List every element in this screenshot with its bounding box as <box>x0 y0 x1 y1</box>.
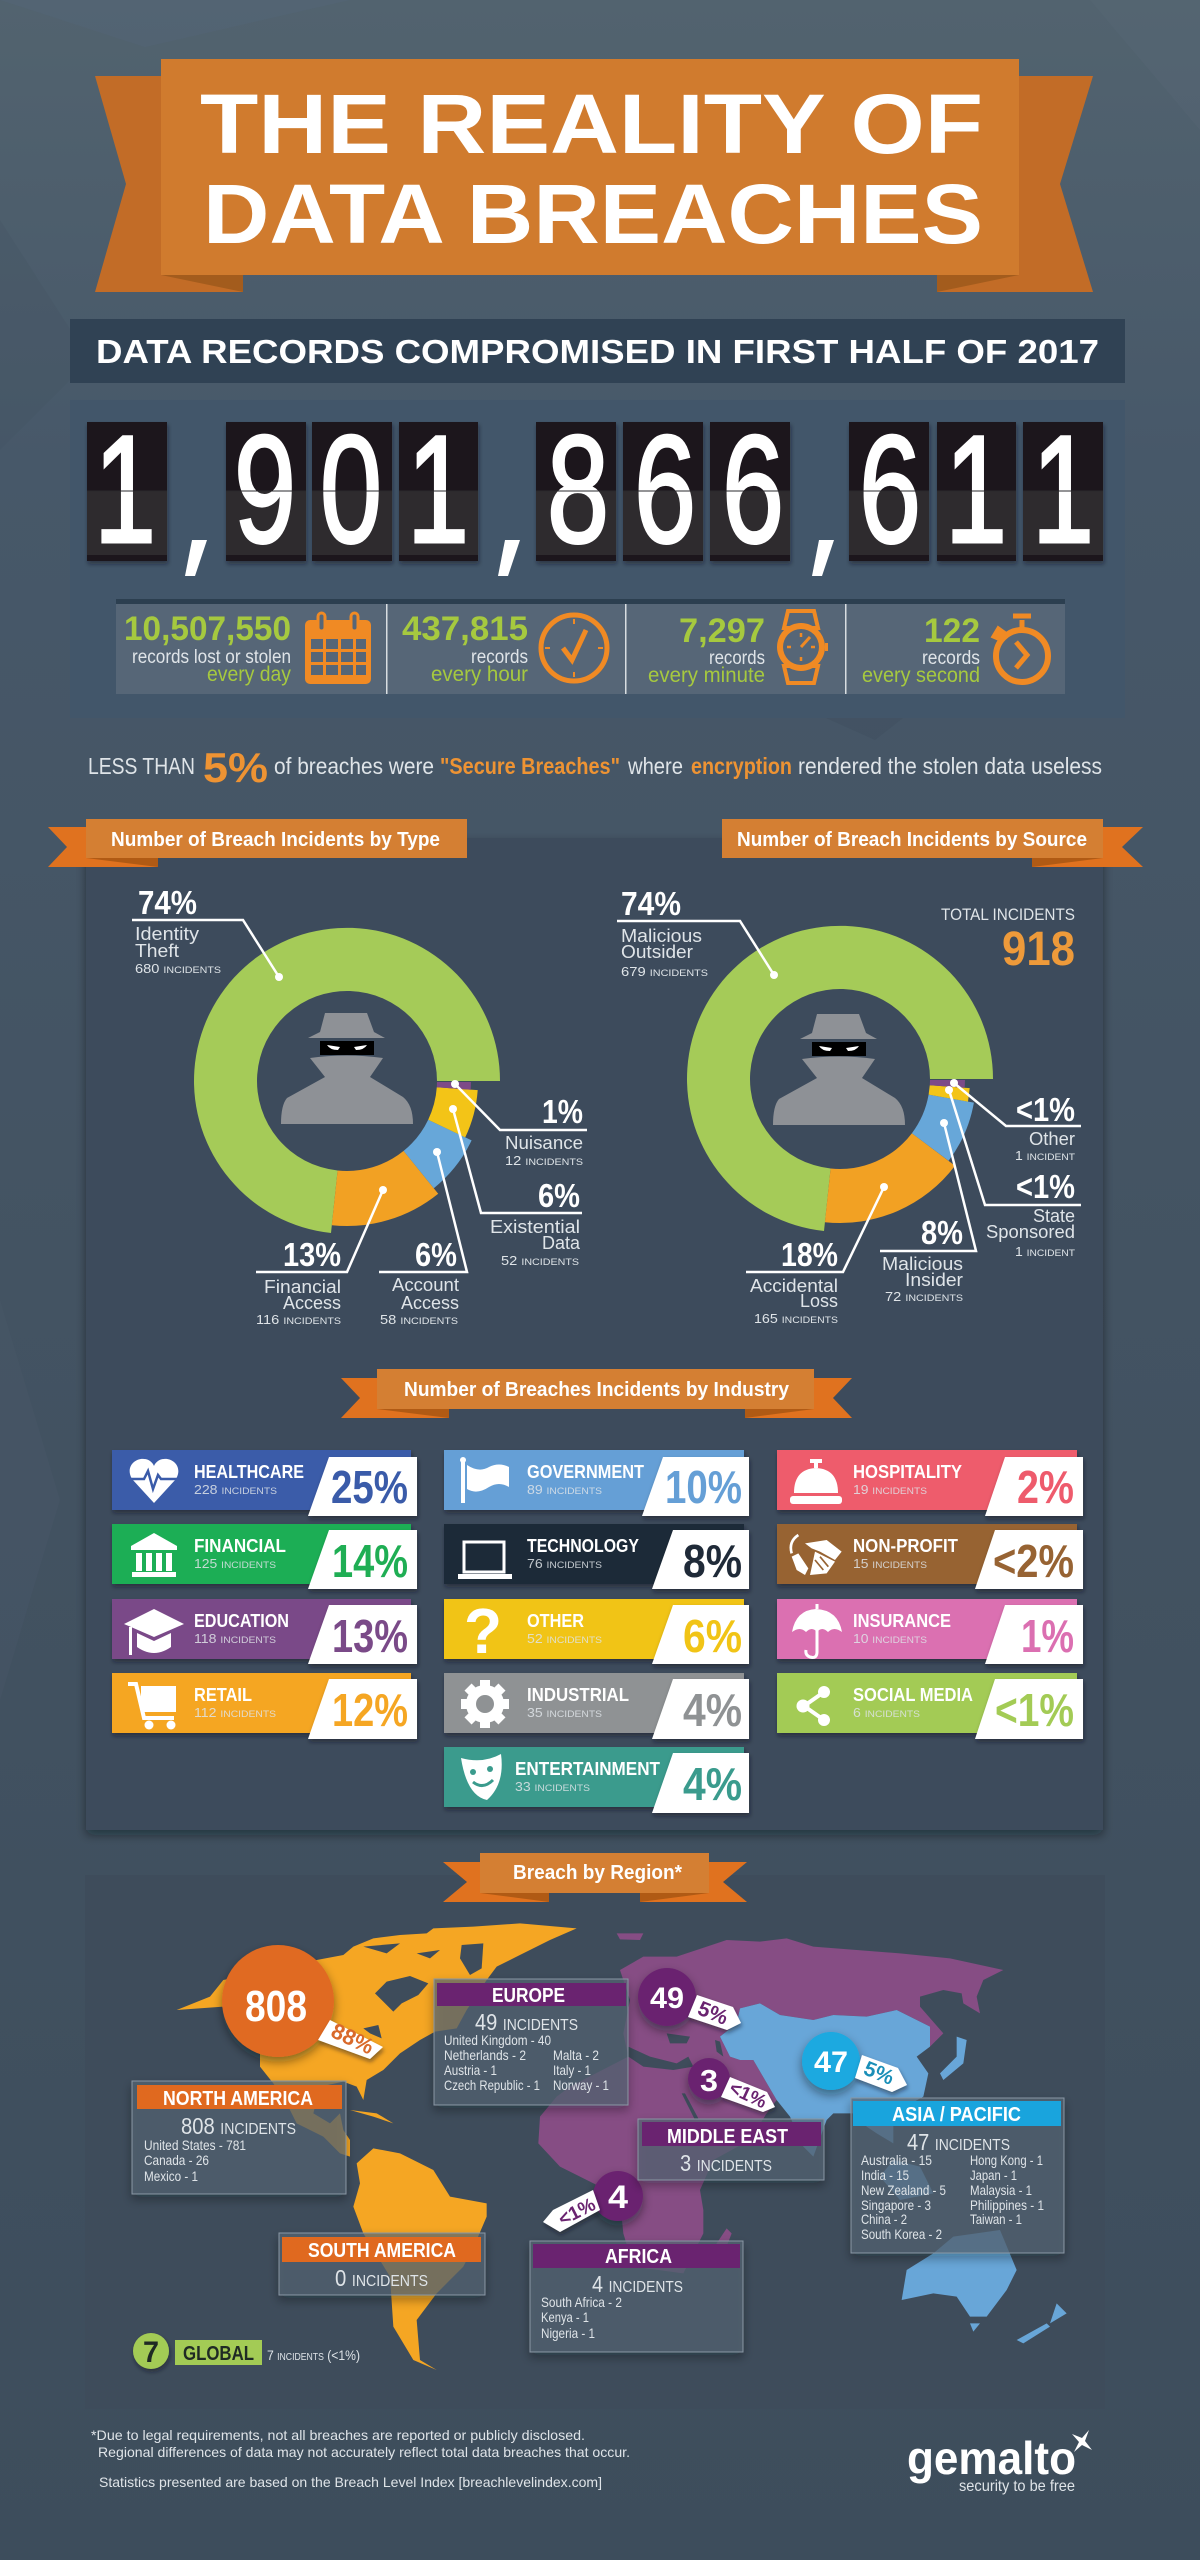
callout: malicious outsider: Malicious <box>621 926 702 946</box>
icon: spy <box>773 1014 905 1125</box>
tag: africa <1% <box>543 2190 600 2232</box>
icon: service bell <box>790 1459 842 1504</box>
bar: healthcare: 25% <box>331 1461 408 1513</box>
panel: south america: SOUTH AMERICA <box>308 2240 456 2262</box>
bar: technology <box>444 1524 749 1589</box>
callout: other: <1% <box>1016 1091 1075 1128</box>
tag: 88%: 88% <box>327 2018 378 2059</box>
icon: shopping cart <box>128 1684 176 1730</box>
bar: government <box>444 1450 749 1516</box>
panel: middle east: 3 INCIDENTS <box>680 2150 772 2176</box>
icon: gear <box>451 1670 519 1738</box>
badge: asia pacific 47: 47 <box>814 2046 848 2079</box>
callout: financial access: 13% <box>283 1236 341 1273</box>
bar: other: 52 INCIDENTS <box>527 1631 602 1646</box>
icon: umbrella <box>792 1604 842 1657</box>
bar: retail <box>112 1673 417 1739</box>
total incidents: 918 <box>1002 923 1075 976</box>
panel: north america: United States - 781 <box>144 2137 246 2153</box>
legend: global: 7 INCIDENTS (<1%) <box>267 2347 360 2363</box>
icon: flag <box>460 1457 509 1503</box>
flip counter: 1 <box>945 404 1007 575</box>
callout: malicious insider: Malicious <box>882 1254 963 1274</box>
stat: every second <box>862 612 980 687</box>
bar: other: 6% <box>683 1610 742 1662</box>
panel: africa <box>530 2241 743 2352</box>
callout: nuisance: Nuisance <box>505 1133 583 1153</box>
bar: hospitality <box>777 1450 1083 1516</box>
title ribbon <box>95 59 1093 292</box>
stat: every minute: records <box>709 648 765 669</box>
bar: education <box>112 1599 417 1664</box>
bar: healthcare <box>112 1450 417 1516</box>
badge: middle east 3: 3 <box>700 2063 718 2098</box>
stat: every minute: every minute <box>648 664 765 687</box>
callout: state sponsored: State <box>1033 1206 1075 1226</box>
legend: global <box>133 2333 360 2369</box>
panel: europe: 49 INCIDENTS <box>475 2009 578 2035</box>
stats strip <box>116 599 1065 694</box>
callout: malicious insider: Insider <box>905 1270 963 1290</box>
bar: government: GOVERNMENT <box>527 1462 644 1482</box>
legend: global: 7 <box>143 2336 159 2369</box>
bar: non-profit: 15 INCIDENTS <box>853 1556 927 1571</box>
panel: africa: AFRICA <box>605 2246 672 2268</box>
stat: every minute: 7,297 <box>679 612 765 650</box>
tag: asia pacific 5% <box>855 2055 907 2092</box>
panel: asia pacific: Australia - 15 <box>861 2152 932 2168</box>
flip counter: 1 <box>407 404 469 575</box>
stat: every second: 122 <box>924 612 980 650</box>
icon: handshake <box>791 1535 842 1575</box>
callout: account access <box>379 1148 467 1327</box>
badge: africa 4: 4 <box>608 2179 628 2215</box>
bar: education: EDUCATION <box>194 1611 289 1631</box>
bar: entertainment: ENTERTAINMENT <box>515 1759 660 1779</box>
bar: social media: 6 INCIDENTS <box>853 1705 920 1720</box>
panel: europe: Austria - 1 <box>444 2062 497 2078</box>
bar: industrial: 35 INCIDENTS <box>527 1705 602 1720</box>
panel: asia pacific: ASIA / PACIFIC <box>892 2104 1021 2126</box>
logo: gemalto: gemalto <box>907 2432 1076 2484</box>
map: eurasia and africa <box>538 1933 1067 2343</box>
badge: asia pacific 47 <box>802 2032 860 2090</box>
tag: europe 5%: 5% <box>694 1997 731 2030</box>
callout: other: Other <box>1029 1129 1075 1149</box>
donut chart: by type <box>194 928 500 1233</box>
icon: bank <box>131 1533 177 1577</box>
icon: stopwatch <box>992 616 1048 682</box>
icon: wristwatch <box>777 611 828 683</box>
stat: every second: records <box>922 648 980 669</box>
callout: accidental loss: 18% <box>781 1236 838 1273</box>
panel: asia pacific: 47 INCIDENTS <box>907 2129 1010 2155</box>
ribbon: by region <box>443 1853 747 1902</box>
stat: every second: every second <box>862 664 980 687</box>
ribbon: by type: Number of Breach Incidents by Type <box>111 829 440 851</box>
tag: middle east <1%: <1% <box>726 2078 770 2113</box>
callout: account access: Access <box>401 1293 459 1313</box>
callout: accidental loss <box>746 1183 888 1326</box>
callout: nuisance: 1% <box>542 1093 583 1130</box>
panel: north america: 808 INCIDENTS <box>181 2113 296 2139</box>
encryption statement: of breaches were <box>274 753 434 779</box>
bar: financial <box>112 1524 417 1589</box>
stat: every day: 10,507,550 <box>124 610 291 648</box>
subtitle bar: DATA RECORDS COMPROMISED IN FIRST HALF OF 2017 <box>96 333 1099 370</box>
panel: north america: NORTH AMERICA <box>163 2088 313 2110</box>
footnote <box>91 2427 630 2490</box>
panel: middle east <box>638 2119 824 2180</box>
callout: state sponsored: 1 INCIDENT <box>1015 1244 1075 1259</box>
encryption statement: where <box>627 753 683 779</box>
bar: insurance <box>777 1599 1083 1664</box>
badge: europe 49 <box>638 1968 696 2026</box>
callout: malicious outsider: 74% <box>621 885 681 922</box>
footnote: Statistics presented are based on the Breach Level Index [breachlevelindex.com] <box>99 2474 602 2490</box>
panel: asia pacific: Hong Kong - 1 <box>970 2152 1043 2168</box>
bar: retail: RETAIL <box>194 1685 252 1705</box>
callout: malicious outsider: 679 INCIDENTS <box>621 964 708 979</box>
bar: financial: FINANCIAL <box>194 1536 286 1556</box>
panel: asia pacific: Japan - 1 <box>970 2167 1017 2183</box>
bar: industrial <box>444 1670 749 1739</box>
panel: europe: EUROPE <box>492 1985 565 2007</box>
stat: every day: every day <box>207 663 291 686</box>
panel: asia pacific: New Zealand - 5 <box>861 2182 946 2198</box>
bar: industrial: INDUSTRIAL <box>527 1685 629 1705</box>
callout: existential data <box>449 1105 582 1268</box>
panel: asia pacific: India - 15 <box>861 2167 909 2183</box>
icon: theatre mask <box>461 1754 502 1800</box>
panel: incidents <box>86 838 1103 1830</box>
bar: entertainment <box>444 1747 749 1813</box>
flip counter: 6 <box>859 404 921 575</box>
panel: map <box>85 1875 1105 2409</box>
callout: existential data: 52 INCIDENTS <box>501 1253 579 1268</box>
callout: accidental loss: 165 INCIDENTS <box>754 1311 838 1326</box>
bar: government: 10% <box>665 1461 742 1513</box>
bar: entertainment: 33 INCIDENTS <box>515 1779 590 1794</box>
panel: asia pacific <box>851 2098 1064 2253</box>
bar: social media <box>777 1673 1083 1739</box>
flip counter: 1 <box>1032 404 1094 575</box>
map: americas <box>177 1923 577 2370</box>
bar: other <box>444 1595 749 1667</box>
icon: question mark: ? <box>464 1595 502 1667</box>
panel: africa: 4 INCIDENTS <box>592 2271 683 2297</box>
bar: hospitality: 19 INCIDENTS <box>853 1482 927 1497</box>
encryption statement: LESS THAN <box>88 753 195 779</box>
bar: education: 13% <box>332 1610 408 1662</box>
title ribbon: THE REALITY OF <box>200 77 983 171</box>
callout: identity theft <box>132 884 283 981</box>
panel: north america <box>132 2081 346 2194</box>
total incidents: TOTAL INCIDENTS <box>941 905 1075 924</box>
subtitle bar <box>70 319 1125 383</box>
ribbon: by type <box>48 819 467 867</box>
flip counter: 0 <box>320 404 382 575</box>
panel: africa: Nigeria - 1 <box>541 2325 595 2341</box>
panel: europe: Italy - 1 <box>553 2062 591 2078</box>
panel: europe: United Kingdom - 40 <box>444 2032 551 2048</box>
ribbon: by industry: Number of Breaches Incidents by Industry <box>404 1379 790 1401</box>
callout: financial access: Access <box>283 1293 341 1313</box>
bar: non-profit <box>777 1524 1083 1589</box>
flip counter: 8 <box>547 404 609 575</box>
stat: every hour: records <box>471 647 528 668</box>
ribbon: by industry <box>341 1369 852 1418</box>
ribbon: by region: Breach by Region* <box>513 1862 682 1884</box>
callout: existential data: Existential <box>490 1217 580 1237</box>
panel: asia pacific: South Korea - 2 <box>861 2226 942 2242</box>
bar: government: 89 INCIDENTS <box>527 1482 602 1497</box>
stat: every day: records lost or stolen <box>132 647 291 668</box>
stat: every hour: every hour <box>431 663 528 686</box>
icon: heart <box>130 1459 178 1503</box>
stat: every day <box>124 610 291 686</box>
flip counter: 1 <box>94 404 156 575</box>
callout: financial access: Financial <box>264 1277 341 1297</box>
callout: state sponsored: Sponsored <box>986 1222 1075 1242</box>
bar: non-profit: NON-PROFIT <box>853 1536 958 1556</box>
encryption statement <box>88 744 1102 791</box>
panel: middle east: MIDDLE EAST <box>667 2126 788 2148</box>
badge: africa 4 <box>593 2171 643 2221</box>
stat: every minute <box>648 612 765 687</box>
flip counter: 6 <box>634 404 696 575</box>
bar: hospitality: HOSPITALITY <box>853 1462 962 1482</box>
callout: malicious outsider <box>617 885 778 979</box>
callout: existential data: Data <box>542 1233 581 1253</box>
footnote: *Due to legal requirements, not all breaches are reported or publicly disclosed. <box>91 2427 585 2443</box>
badge: middle east 3 <box>688 2058 730 2100</box>
bar: social media: SOCIAL MEDIA <box>853 1685 973 1705</box>
bar: technology: 8% <box>683 1535 742 1587</box>
callout: financial access: 116 INCIDENTS <box>256 1312 341 1327</box>
icon: clock <box>541 615 607 681</box>
bar: hospitality: 2% <box>1017 1461 1074 1513</box>
badge: europe 49: 49 <box>650 1982 684 2015</box>
flip counter: 6 <box>722 404 784 575</box>
ribbon: by source <box>722 819 1143 867</box>
donut chart: by source <box>687 926 993 1231</box>
callout: account access: 6% <box>415 1236 457 1273</box>
panel: north america: Canada - 26 <box>144 2152 209 2168</box>
panel: asia pacific: Malaysia - 1 <box>970 2182 1032 2198</box>
callout: existential data: 6% <box>538 1177 580 1214</box>
callout: malicious insider <box>880 1119 976 1304</box>
badge: north america 808 <box>222 1945 334 2057</box>
legend: global: GLOBAL <box>183 2343 254 2365</box>
callout: malicious insider: 8% <box>921 1214 963 1251</box>
stat: every hour <box>402 610 528 686</box>
bar: industrial: 4% <box>683 1684 742 1736</box>
badge: north america 808: 808 <box>245 1982 307 2031</box>
bar: other: OTHER <box>527 1611 584 1631</box>
callout: identity theft: Identity <box>135 924 199 944</box>
callout: other: 1 INCIDENT <box>1015 1148 1075 1163</box>
icon: laptop <box>458 1542 512 1579</box>
bar: financial: 14% <box>332 1535 408 1587</box>
bar: social media: <1% <box>995 1684 1074 1736</box>
callout: accidental loss: Loss <box>800 1291 838 1311</box>
title ribbon: DATA BREACHES <box>203 167 983 261</box>
panel: north america: Mexico - 1 <box>144 2168 198 2184</box>
bar: healthcare: HEALTHCARE <box>194 1462 304 1482</box>
panel: europe: Malta - 2 <box>553 2047 599 2063</box>
world map <box>177 1923 1067 2370</box>
callout: state sponsored: <1% <box>1016 1168 1075 1205</box>
panel: asia pacific: Taiwan - 1 <box>970 2211 1022 2227</box>
bar: retail: 112 INCIDENTS <box>194 1705 276 1720</box>
callout: account access: Account <box>392 1275 459 1295</box>
panel: south america: 0 INCIDENTS <box>335 2265 428 2291</box>
bar: insurance: 10 INCIDENTS <box>853 1631 927 1646</box>
callout: identity theft: 680 INCIDENTS <box>135 961 221 976</box>
callout: identity theft: Theft <box>135 941 179 961</box>
panel: africa: Kenya - 1 <box>541 2309 589 2325</box>
bar: technology: 76 INCIDENTS <box>527 1556 602 1571</box>
panel: africa: South Africa - 2 <box>541 2294 622 2310</box>
panel: europe: Czech Republic - 1 <box>444 2077 540 2093</box>
panel: record counter <box>70 400 1125 718</box>
callout: account access: 58 INCIDENTS <box>380 1312 458 1327</box>
flip counter: 9 <box>234 404 296 575</box>
bar: technology: TECHNOLOGY <box>527 1536 639 1556</box>
flip counter <box>87 404 1103 576</box>
stat: every hour: 437,815 <box>402 610 528 648</box>
callout: nuisance: 12 INCIDENTS <box>505 1153 583 1168</box>
bar: insurance: INSURANCE <box>853 1611 951 1631</box>
bar: retail: 12% <box>332 1684 408 1736</box>
panel: asia pacific: Singapore - 3 <box>861 2197 931 2213</box>
bar: entertainment: 4% <box>683 1758 742 1810</box>
panel: europe: Netherlands - 2 <box>444 2047 526 2063</box>
tag: asia pacific 5%: 5% <box>860 2057 897 2090</box>
callout: state sponsored <box>945 1086 1081 1259</box>
encryption statement: rendered the stolen data useless <box>798 753 1102 779</box>
icon: graduation cap <box>124 1609 184 1655</box>
bar: education: 118 INCIDENTS <box>194 1631 276 1646</box>
bar: non-profit: <2% <box>993 1535 1074 1587</box>
bar: healthcare: 228 INCIDENTS <box>194 1482 277 1497</box>
panel: asia pacific: China - 2 <box>861 2211 907 2227</box>
bar: financial: 125 INCIDENTS <box>194 1556 276 1571</box>
panel: europe <box>434 1979 628 2105</box>
panel: europe: Norway - 1 <box>553 2077 609 2093</box>
total incidents <box>941 905 1075 976</box>
icon: spy <box>281 1013 413 1124</box>
callout: malicious outsider: Outsider <box>621 942 693 962</box>
icon: calendar <box>305 613 371 684</box>
callout: identity theft: 74% <box>138 884 197 921</box>
panel: asia pacific: Philippines - 1 <box>970 2197 1044 2213</box>
tag: africa <1%: <1% <box>555 2194 599 2231</box>
icon: share <box>796 1686 830 1726</box>
callout: other <box>950 1079 1081 1163</box>
callout: financial access <box>256 1186 387 1327</box>
callout: malicious insider: 72 INCIDENTS <box>885 1289 963 1304</box>
footnote: Regional differences of data may not accurately reflect total data breaches that occur. <box>98 2444 630 2460</box>
logo: gemalto: security to be free <box>959 2478 1075 2495</box>
tag: europe 5% <box>688 1995 741 2030</box>
panel: south america <box>279 2233 485 2295</box>
ribbon: by source: Number of Breach Incidents by Source <box>737 829 1087 851</box>
encryption statement: 5% <box>203 744 268 791</box>
bar: insurance: 1% <box>1021 1610 1074 1662</box>
encryption statement: encryption <box>691 753 792 779</box>
callout: nuisance <box>451 1080 587 1168</box>
encryption statement: "Secure Breaches" <box>440 753 620 779</box>
callout: accidental loss: Accidental <box>750 1276 838 1296</box>
